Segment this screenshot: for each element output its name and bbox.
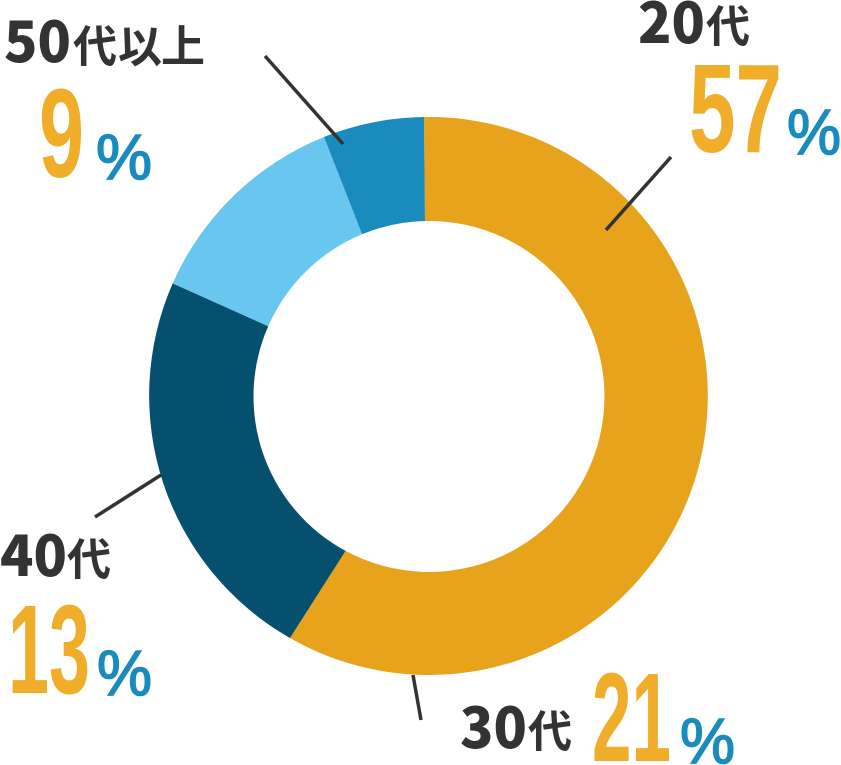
segment: 30代 and 40代 dark xyxy=(149,283,346,638)
label: 20代 57%: 代 xyxy=(706,3,750,52)
label: 50代以上 9%: 代 xyxy=(73,23,117,72)
leader line: 40代 xyxy=(95,475,161,517)
label: 40代 13%: 40 xyxy=(0,512,67,593)
segment: light blue xyxy=(173,137,362,326)
label: 20代 57% xyxy=(638,0,841,179)
label: 50代以上 9%: 上 xyxy=(161,23,205,72)
label: 50代以上 9%: 9 xyxy=(39,63,84,204)
label: 40代 13%: 13 xyxy=(8,579,90,720)
label: 30代 21%: 代 xyxy=(528,708,572,757)
donut chart xyxy=(149,117,708,675)
segment: 20代 57% xyxy=(290,117,708,675)
label: 30代 21% xyxy=(460,647,735,765)
label: 30代 21%: 30 xyxy=(460,684,527,765)
segment: blue xyxy=(324,117,425,234)
label: 50代以上 9%: % xyxy=(96,121,152,193)
label: 40代 13%: % xyxy=(97,637,152,709)
leader line: 50代以上 xyxy=(265,56,343,144)
label: 40代 13% xyxy=(0,512,152,720)
leader line: 30代 xyxy=(413,675,421,720)
label: 50代以上 9% xyxy=(4,0,205,204)
leader line: 20代 xyxy=(606,157,671,230)
label: 40代 13%: 代 xyxy=(67,536,111,585)
label: 50代以上 9%: 50 xyxy=(4,0,71,79)
label: 50代以上 9%: 以 xyxy=(118,23,162,72)
label: 20代 57%: 57 xyxy=(689,38,782,179)
